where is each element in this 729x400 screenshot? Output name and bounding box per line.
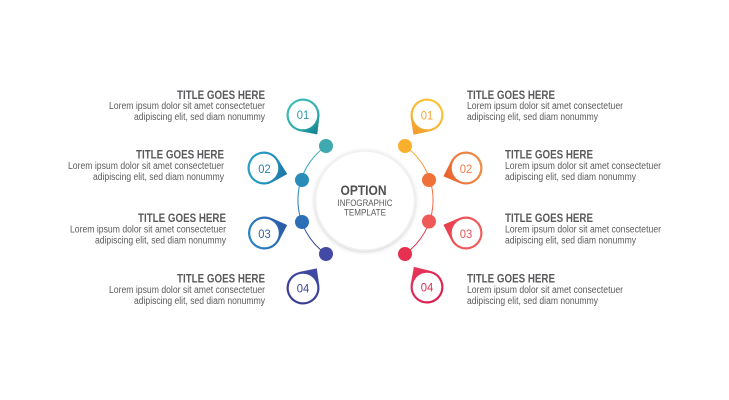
text block: right 03 xyxy=(505,211,662,246)
text block: left 01: Lorem ipsum dolor sit amet consectetuer xyxy=(109,101,266,112)
text block: left 03: adipiscing elit, sed diam nonummy xyxy=(95,236,226,246)
dot: left 02 xyxy=(295,173,309,187)
pin: right 03 xyxy=(438,209,487,254)
text block: right 02: Lorem ipsum dolor sit amet consectetuer xyxy=(505,161,662,172)
text block: left 04: TITLE GOES HERE xyxy=(177,272,265,286)
text block: right 01 xyxy=(467,88,624,123)
dot: left 03 xyxy=(295,215,309,229)
pin: left 02 xyxy=(244,148,291,190)
pin: left 04: 04 xyxy=(297,284,310,296)
dot: right 01 xyxy=(398,139,412,153)
text block: left 02 xyxy=(68,148,225,183)
connector arc: left xyxy=(298,146,326,254)
dot: right 02 xyxy=(422,173,436,187)
pin: left 01: 01 xyxy=(297,110,309,122)
text block: right 04: Lorem ipsum dolor sit amet consectetuer xyxy=(467,285,624,296)
text block: left 04 xyxy=(109,272,266,307)
connector arc: right xyxy=(405,146,433,254)
text block: right 02 xyxy=(505,148,662,183)
pin: left 03: 03 xyxy=(258,229,271,241)
text block: left 03: TITLE GOES HERE xyxy=(138,211,226,225)
center heading: OPTION xyxy=(340,182,386,198)
text block: left 01: adipiscing elit, sed diam nonummy xyxy=(134,112,265,123)
pin: right 03: 03 xyxy=(460,229,472,241)
text block: right 03: TITLE GOES HERE xyxy=(505,211,593,225)
text block: right 03: adipiscing elit, sed diam nonummy xyxy=(505,236,636,246)
text block: right 04: TITLE GOES HERE xyxy=(467,272,555,286)
dot: right 04 xyxy=(398,247,412,261)
pin: left 04 xyxy=(280,259,330,311)
text block: left 02: adipiscing elit, sed diam nonummy xyxy=(93,172,224,183)
text block: right 02: adipiscing elit, sed diam nonummy xyxy=(505,172,636,183)
pin: right 04: 04 xyxy=(421,282,434,294)
center subtitle line 2: TEMPLATE xyxy=(344,208,386,218)
pin: left 01 xyxy=(280,92,331,144)
text block: left 03: Lorem ipsum dolor sit amet consectetuer xyxy=(70,224,227,236)
text block: left 01: TITLE GOES HERE xyxy=(177,88,265,102)
text block: right 02: TITLE GOES HERE xyxy=(505,148,593,162)
text block: right 01: Lorem ipsum dolor sit amet consectetuer xyxy=(467,101,624,112)
pin: left 02: 02 xyxy=(258,164,271,176)
dot: left 04 xyxy=(319,247,333,261)
text block: left 02: Lorem ipsum dolor sit amet consectetuer xyxy=(68,161,225,172)
text block: left 03 xyxy=(70,211,227,246)
text block: right 01: adipiscing elit, sed diam nonummy xyxy=(467,112,598,123)
text block: left 04: Lorem ipsum dolor sit amet consectetuer xyxy=(109,285,266,296)
text block: left 02: TITLE GOES HERE xyxy=(136,148,224,162)
text block: right 01: TITLE GOES HERE xyxy=(467,88,555,102)
text block: right 04: adipiscing elit, sed diam nonummy xyxy=(467,296,598,307)
center subtitle line 1: INFOGRAPHIC xyxy=(338,198,393,209)
pin: left 03 xyxy=(243,209,293,254)
text block: right 04 xyxy=(467,272,624,307)
pin: right 02: 02 xyxy=(460,164,472,176)
text block: right 03: Lorem ipsum dolor sit amet consectetuer xyxy=(505,224,662,236)
pin: right 02 xyxy=(438,147,487,192)
pin: right 04 xyxy=(400,258,450,310)
pin: right 01 xyxy=(400,92,450,144)
text block: left 04: adipiscing elit, sed diam nonummy xyxy=(134,296,265,307)
dot: right 03 xyxy=(422,214,436,228)
center circle xyxy=(316,151,414,250)
pin: right 01: 01 xyxy=(421,110,433,122)
dot: left 01 xyxy=(319,139,333,153)
text block: left 01 xyxy=(109,88,266,123)
